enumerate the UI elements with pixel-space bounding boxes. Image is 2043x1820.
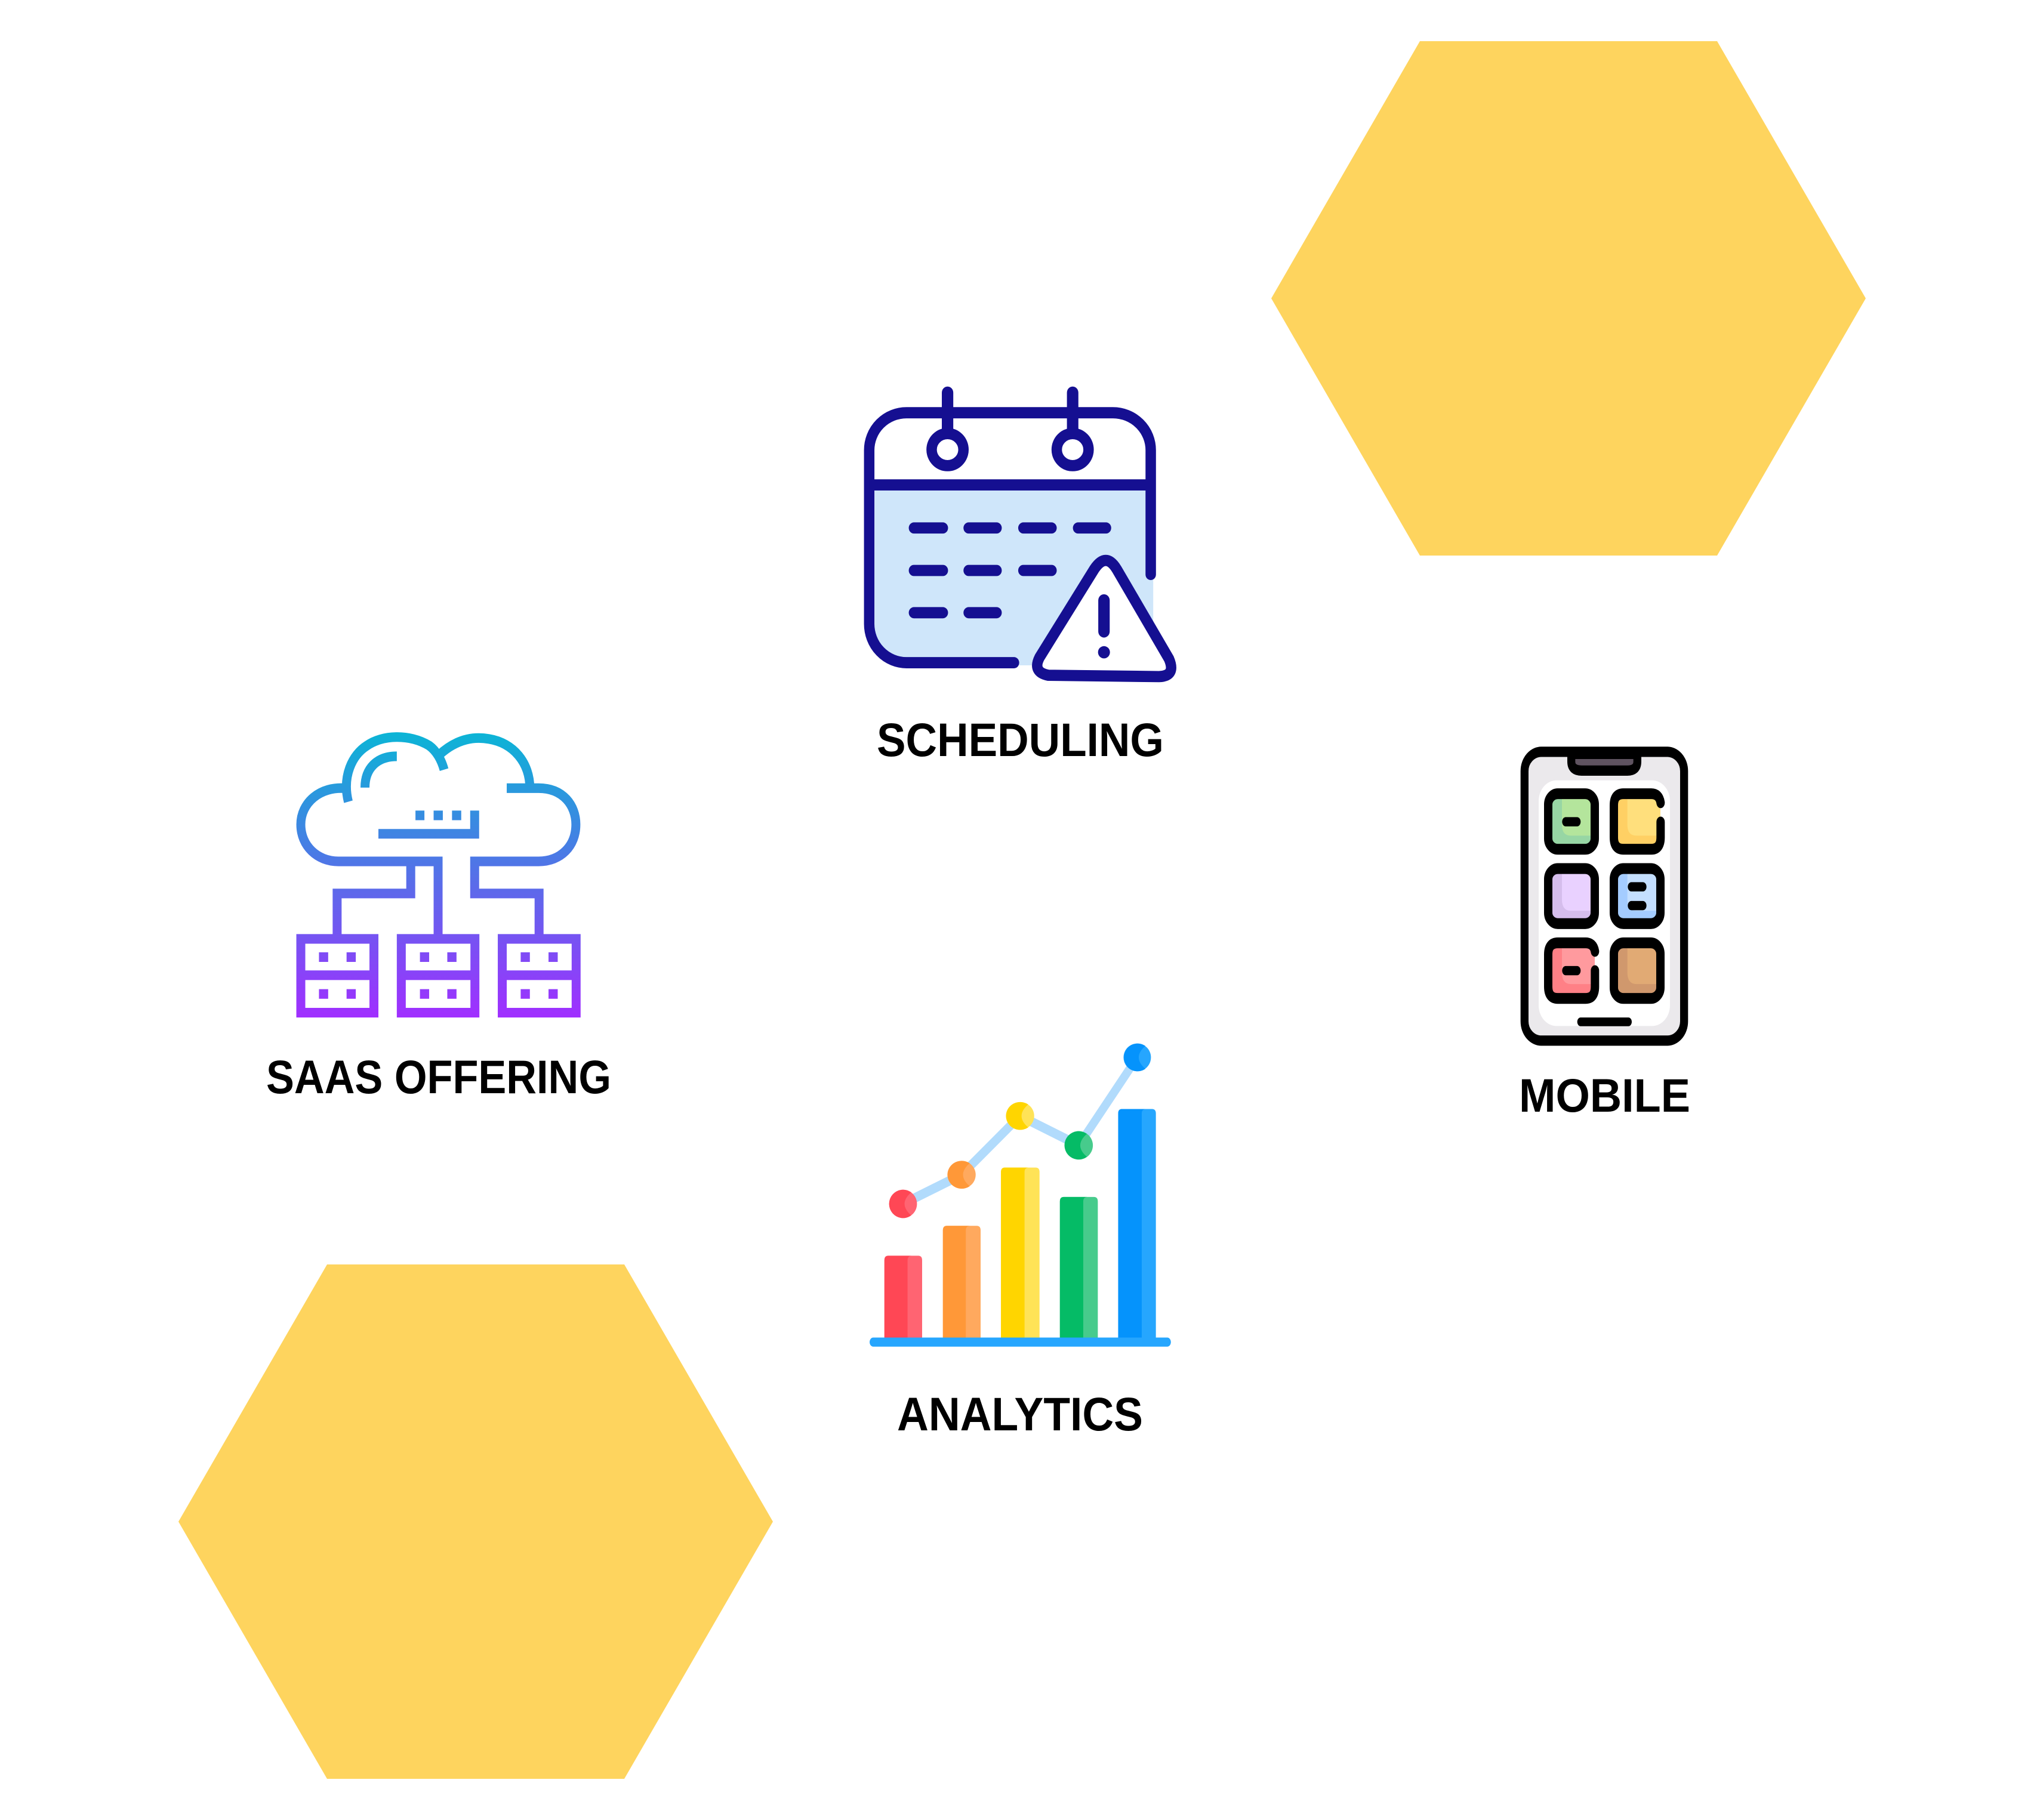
point: green (1065, 1131, 1093, 1159)
icon: smartphone with apps (1524, 752, 1684, 1041)
warning dot (1098, 646, 1110, 658)
feature: saas offering (266, 737, 611, 1103)
home bar (1580, 1011, 1628, 1032)
calendar body fill (874, 491, 1153, 665)
baseline (873, 1332, 1167, 1352)
phone notch (1571, 754, 1637, 770)
decorative hexagon: top right (1271, 41, 1866, 556)
phone body (1524, 752, 1684, 1041)
feature: mobile (1519, 752, 1690, 1122)
trend line (903, 1057, 1137, 1204)
point: red (889, 1190, 917, 1218)
app tile: blue (1614, 869, 1660, 924)
app tile: red (1548, 943, 1595, 998)
bar: red (885, 1256, 922, 1339)
icon: calendar with warning triangle (869, 393, 1171, 677)
app tile: brown (1614, 943, 1660, 998)
feature: analytics (873, 1044, 1167, 1440)
point: yellow (1006, 1102, 1034, 1130)
label: mobile: MOBILE (1519, 1069, 1690, 1122)
label: scheduling: SCHEDULING (877, 713, 1164, 766)
point: orange (947, 1161, 976, 1189)
icon: bar and line chart (873, 1044, 1167, 1342)
bar: green (1060, 1197, 1098, 1339)
app tile: purple (1548, 869, 1595, 924)
calendar outline (869, 393, 1171, 677)
icon: cloud connected to servers (301, 737, 576, 1013)
bar: blue (1118, 1109, 1156, 1339)
app tile: green (1548, 794, 1595, 849)
bar: orange (943, 1226, 981, 1339)
decorative hexagon: bottom left (178, 1264, 773, 1779)
bar: yellow (1001, 1168, 1040, 1339)
feature: scheduling (869, 393, 1171, 766)
phone screen (1539, 781, 1670, 1026)
app tile: yellow (1614, 794, 1660, 849)
label: saas offering: SAAS OFFERING (266, 1050, 611, 1103)
point: blue (1123, 1044, 1151, 1071)
label: analytics: ANALYTICS (897, 1387, 1143, 1440)
